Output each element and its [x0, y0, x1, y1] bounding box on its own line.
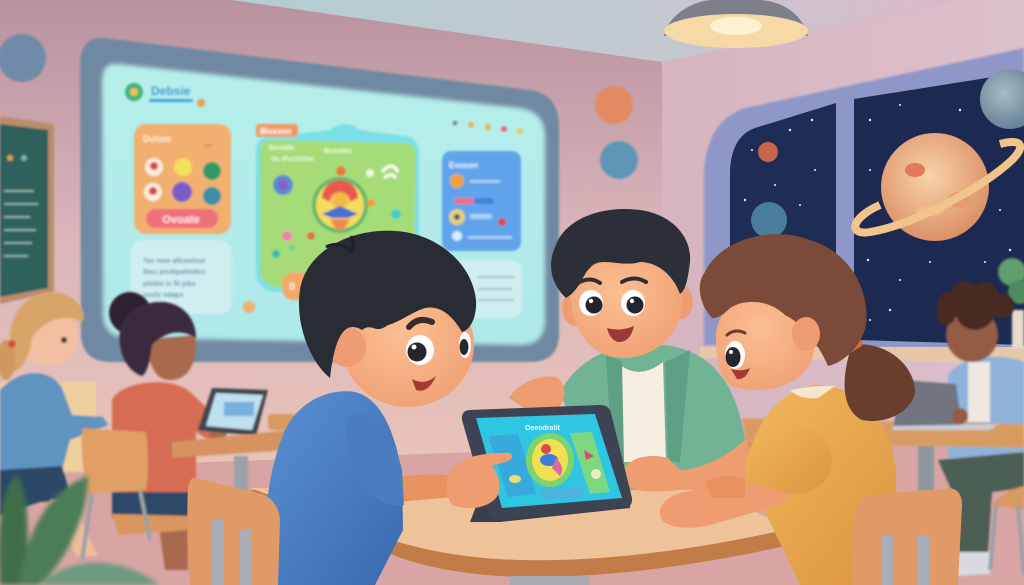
background table left [172, 414, 300, 490]
tablet body [462, 405, 632, 520]
screen logo and title [125, 83, 205, 107]
tablet small icons [509, 450, 601, 483]
girl in orange shirt [660, 234, 915, 585]
foreground table [250, 488, 795, 585]
hair [551, 209, 690, 298]
green card: Bvosten [324, 148, 352, 155]
collar [790, 386, 835, 398]
forearm and hand [622, 440, 760, 492]
face [716, 288, 814, 390]
eye far [459, 332, 471, 358]
boy in blue shirt [264, 231, 476, 585]
brows [578, 278, 646, 283]
right chair [990, 486, 1024, 510]
eye [725, 341, 745, 369]
space window [700, 48, 1024, 363]
stars [744, 104, 1011, 321]
head [700, 234, 915, 421]
blue card [442, 151, 521, 251]
orange shirt [745, 385, 898, 585]
window sill [700, 347, 1024, 363]
eyebrow [409, 320, 432, 327]
wall decoration circles [0, 34, 644, 226]
green card: Eevrtds [269, 145, 295, 152]
table tablet [462, 405, 632, 522]
face [148, 335, 196, 380]
window right pane [854, 72, 1024, 345]
collar [606, 350, 690, 462]
pointing hand [509, 376, 564, 411]
sleeve [345, 414, 404, 506]
tablet target [526, 433, 574, 487]
right foreground chair [852, 488, 962, 585]
white undershirt [620, 362, 666, 462]
ear [328, 327, 366, 367]
window left pane [730, 103, 836, 345]
orange card: Ovoate [162, 214, 200, 226]
blue card: Evoxon [449, 161, 478, 170]
green card: 0 [289, 281, 295, 293]
hair [299, 231, 476, 378]
green card: Bloxxon [260, 127, 292, 136]
desk [742, 418, 1024, 448]
mouth [731, 368, 750, 379]
orange card [134, 124, 231, 234]
background girl with bun [82, 292, 227, 570]
red shirt [112, 382, 225, 492]
seat [112, 514, 190, 535]
chalkboard [0, 116, 54, 304]
left foreground plant [0, 476, 160, 585]
face [946, 308, 998, 362]
chair back [82, 428, 148, 494]
mouth [412, 376, 436, 391]
pants [938, 452, 1024, 552]
screen logo and title: Debsie [151, 84, 191, 98]
plant on sill [998, 258, 1024, 348]
head [551, 209, 693, 358]
moon [980, 69, 1024, 129]
small red planet [758, 142, 778, 162]
status dots [243, 120, 523, 313]
boy pointing hand [447, 453, 512, 508]
wall screen [80, 38, 559, 362]
forearm [395, 474, 452, 502]
tablet lower button [540, 486, 584, 500]
legs [158, 520, 188, 570]
head [299, 231, 476, 407]
ponytail [845, 344, 915, 421]
shirt [948, 357, 1024, 462]
hair [119, 302, 196, 376]
mouth [607, 326, 634, 342]
bun [109, 292, 151, 334]
laptop [893, 380, 962, 428]
curly hair [937, 281, 1014, 330]
tablet title: Oeeodratit [525, 425, 561, 432]
green card: ita dlvchthlar [271, 156, 315, 163]
text card left: ceule odaps [143, 292, 184, 299]
hair tie [841, 337, 864, 355]
far hand [704, 476, 745, 498]
hand [952, 408, 968, 424]
eye near [406, 335, 434, 365]
text card right [440, 260, 522, 318]
tablet left panel [488, 434, 536, 497]
screen display [102, 64, 545, 345]
window frame [704, 48, 1024, 350]
small table back chair [738, 442, 762, 475]
blue shirt [264, 391, 403, 585]
tablet stand [470, 470, 630, 522]
orange card: Dvtom [143, 134, 171, 144]
ear [792, 317, 820, 351]
right background boy [742, 281, 1024, 576]
background tablet on table [198, 388, 268, 436]
middle boy with green shirt [509, 209, 760, 492]
blonde girl body [0, 373, 108, 478]
text card left: tbss pnxbpatmdes [143, 269, 205, 276]
eyes [579, 290, 603, 316]
hair sprout [326, 236, 353, 252]
arm [660, 440, 795, 528]
tablet right panel [570, 432, 610, 494]
text card left: pleblo ix fit pike [143, 281, 196, 288]
shorts [112, 470, 190, 518]
text card left: Tax mxe aficestion [143, 258, 205, 265]
orange card: ▪▪▪ [204, 141, 213, 150]
left foreground chair [187, 478, 280, 585]
ceiling lamp [664, 0, 808, 48]
screen frame [80, 38, 559, 362]
tablet screen [476, 414, 622, 508]
background girl blonde [0, 292, 108, 556]
small blue planet [751, 202, 787, 238]
sleeve [745, 424, 832, 494]
brow [727, 331, 745, 335]
green shirt [560, 345, 745, 490]
hair [700, 234, 867, 366]
text card left [131, 240, 232, 314]
ringed planet [855, 133, 1020, 241]
green card [256, 124, 419, 300]
